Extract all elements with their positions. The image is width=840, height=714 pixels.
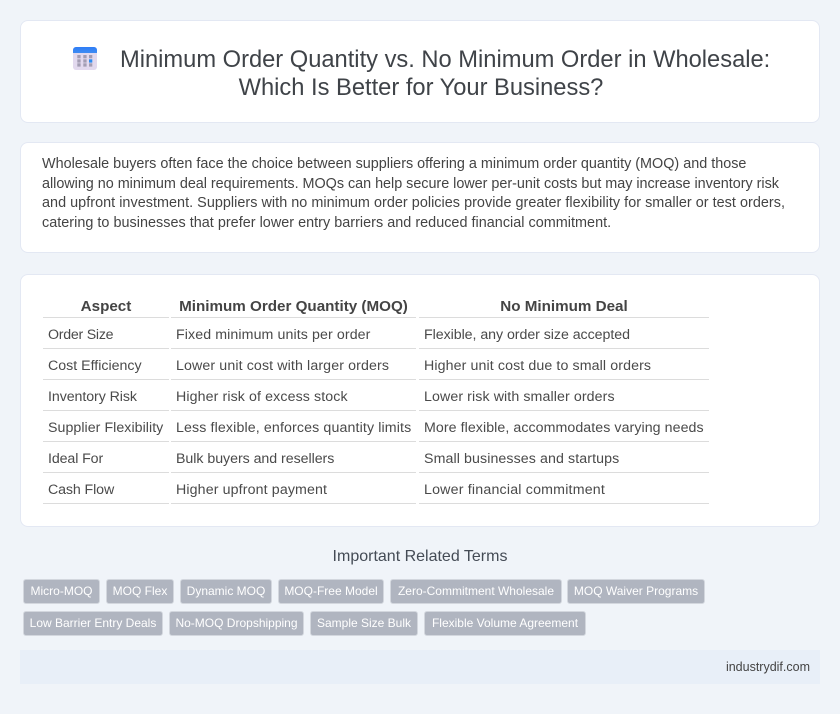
table rows: Higher upfront payment [176,482,327,498]
tag list [23,579,705,636]
tag: MOQ-Free Model [284,584,378,598]
tag [23,611,163,636]
table rows: More flexible, accommodates varying needs [424,420,704,436]
table rows: Order Size [48,327,113,343]
table header [81,298,628,315]
table rows: Small businesses and startups [424,451,619,467]
table header: No Minimum Deal [500,298,628,315]
table rows: Lower risk with smaller orders [424,389,615,405]
text: introduction paragraph: Wholesale buyers often face the choice between suppliers offering a minimum order quantity (MOQ) and those [42,156,746,172]
table rows: Lower unit cost with larger orders [176,358,389,374]
panel: title [20,20,820,123]
text: introduction paragraph [42,156,785,231]
table rows: Ideal For [48,451,103,467]
heading: important related terms: Important Related Terms [333,548,507,565]
text: introduction paragraph: allowing no minimum deal requirements. MOQs can help secure lower per-unit costs but may increase inventory risk [42,176,779,192]
tag: Micro-MOQ [30,584,92,598]
panel: introduction [20,142,820,253]
table rows: Fixed minimum units per order [176,327,370,343]
table rows: Cash Flow [48,482,114,498]
tag: MOQ Flex [113,584,167,598]
table rows: Higher risk of excess stock [176,389,348,405]
tag: Low Barrier Entry Deals [30,616,156,630]
heading: title [120,47,770,101]
tag: Flexible Volume Agreement [432,616,578,630]
tag [390,579,562,604]
table rows: Lower financial commitment [424,482,605,498]
table rows: Supplier Flexibility [48,420,163,436]
table rows: Less flexible, enforces quantity limits [176,420,411,436]
tag: No-MOQ Dropshipping [175,616,298,630]
tag: Dynamic MOQ [187,584,265,598]
icon: calendar [73,47,97,70]
heading: title: Minimum Order Quantity vs. No Minimum Order in Wholesale: [120,47,770,73]
table rows: Inventory Risk [48,389,137,405]
table rows: Higher unit cost due to small orders [424,358,651,374]
heading: title: Which Is Better for Your Business? [239,75,603,101]
tag [567,579,705,604]
tag [424,611,586,636]
table rows [43,317,709,504]
table rows: Flexible, any order size accepted [424,327,630,343]
tag [180,579,272,604]
table header: Aspect [81,298,131,315]
tag: Sample Size Bulk [317,616,411,630]
text: introduction paragraph: catering to businesses that prefer lower entry barriers and reduced financial commitment. [42,215,611,231]
tag: MOQ Waiver Programs [574,584,698,598]
panel: comparison table [20,274,820,527]
tag [23,579,100,604]
tag [106,579,174,604]
footer: site name: industrydif.com [726,660,810,674]
table header: Minimum Order Quantity (MOQ) [179,298,408,315]
table rows: Bulk buyers and resellers [176,451,334,467]
text: introduction paragraph: and upfront investment. Suppliers with no minimum order policies provide greater flexibility for smaller or test orders, [42,195,785,211]
tag [310,611,418,636]
tag: Zero-Commitment Wholesale [398,584,554,598]
tag [278,579,384,604]
tag [169,611,304,636]
table rows: Cost Efficiency [48,358,142,374]
footer [20,650,820,684]
